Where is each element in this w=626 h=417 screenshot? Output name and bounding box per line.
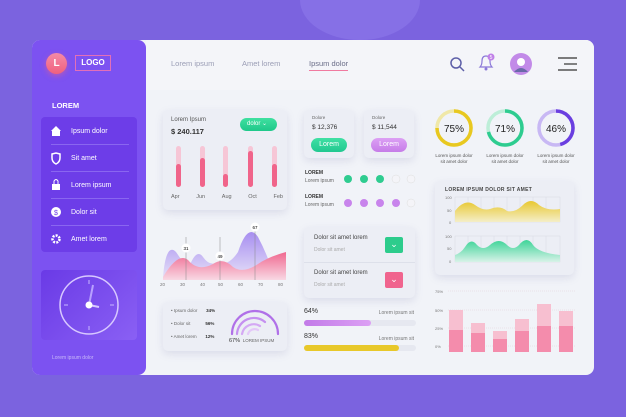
area chart: 67 [252,225,258,230]
rings: sit amet dolor [491,159,519,164]
rings: 75% [444,124,464,135]
card: bars: dolor ⌄ [247,121,267,127]
dolore cards: Dolore [312,115,325,120]
icon: bell: 5 [490,55,493,61]
area chart: 60 [238,282,244,287]
dropdown card: Dolor sit amet lorem [314,235,368,241]
text: $ 11,544 [372,124,397,131]
menu panel: Sit amet [71,155,97,162]
rings: 46% [546,124,566,135]
text: Dolore [372,115,385,120]
line charts card: 0 [449,259,452,264]
menu panel [41,117,137,252]
sidebar: LOREM [52,101,79,110]
rings [435,109,575,164]
icon: avatar [510,53,532,75]
area chart: 70 [258,282,264,287]
rings: sit amet dolor [542,159,570,164]
line charts card: 100 [445,234,452,239]
menu panel: Ipsum dolor [71,128,108,135]
header bar: Amet lorem [242,59,280,68]
dropdown card: ⌄ [390,274,398,284]
dashboard frame [32,40,594,375]
dropdown card: Dolor sit amet lorem [314,270,368,276]
rings: Lorem ipsum dolor [537,153,575,158]
card: bars: Jun [196,194,205,200]
dot rows: LOREM [305,170,323,176]
text: Lorem [379,141,399,148]
dolore cards: Lorem [319,141,339,148]
bar chart: 75% [435,289,443,294]
bar chart: 25% [435,326,443,331]
card: bars: Oct [248,194,257,200]
icon: bell [478,54,494,70]
dot rows: LOREM [305,194,323,200]
card: legend + arcs: 67% LOREM IPSUM [229,338,274,344]
card: bars: Aug [222,194,232,200]
dropdown card: Dolor sit amet [314,282,345,288]
icon: menu [558,57,577,71]
progress bars: Lorem ipsum sit [379,336,414,342]
line charts card: 0 [449,220,452,225]
dot rows [305,170,416,208]
card: legend + arcs: • Ipsum dolor 34% [171,308,215,313]
menu panel: Amet lorem [71,236,107,243]
bar chart [435,289,575,352]
header bar: Ipsum dolor [309,59,348,68]
menu panel: $ [54,210,58,217]
dropdown card [304,227,415,298]
area chart [160,222,286,287]
rings: Lorem ipsum dolor [486,153,524,158]
card: bars [163,110,287,210]
clock panel [41,270,137,340]
logo [46,53,67,74]
icon: search [450,57,464,72]
dolore cards [304,110,354,158]
logo: L [53,58,60,69]
background blobs [300,0,420,40]
line charts card [435,181,574,275]
progress bars [304,308,416,351]
line charts card: 50 [447,246,452,251]
dropdown card: Dolor sit amet [314,247,345,253]
sidebar: Lorem ipsum dolor [52,355,93,361]
progress bars: Lorem ipsum sit [379,310,414,316]
area chart: 20 [160,282,166,287]
card: bars: $ 240.117 [171,127,204,136]
card: legend + arcs: • Dolor sit 56% [171,321,214,326]
line charts card: 50 [447,208,452,213]
bar chart: 50% [435,308,443,313]
menu panel: Dolor sit [71,209,97,216]
sidebar: LOGO [81,58,105,67]
card: bars: Apr [171,194,180,200]
line charts card: 100 [445,195,452,200]
sidebar [32,40,146,375]
dot rows: Lorem ipsum [305,202,334,208]
rings: sit amet dolor [440,159,468,164]
area chart: 30 [180,282,186,287]
progress bars: 83% [304,333,318,340]
area chart: 40 [200,282,206,287]
rings: Lorem ipsum dolor [435,153,473,158]
card: legend + arcs: • Amet lorem 12% [171,334,214,339]
header bar: Lorem ipsum [171,59,214,68]
card: bars: Feb [273,194,283,200]
area chart: 50 [218,282,224,287]
card: bars: Lorem Ipsum [171,117,206,123]
header bar [146,40,594,90]
area chart: 49 [217,254,223,259]
dropdown card: ⌄ [390,239,398,249]
progress bars: 64% [304,308,318,315]
card: legend + arcs [163,302,287,351]
dolore cards: $ 12,376 [312,124,337,131]
area chart: 31 [183,246,189,251]
area chart: 80 [278,282,284,287]
bar chart: 0% [435,344,441,349]
menu panel: Lorem ipsum [71,182,111,189]
line charts card: LOREM IPSUM DOLOR SIT AMET [445,187,532,193]
rings: 71% [495,124,515,135]
dot rows: Lorem ipsum [305,178,334,184]
